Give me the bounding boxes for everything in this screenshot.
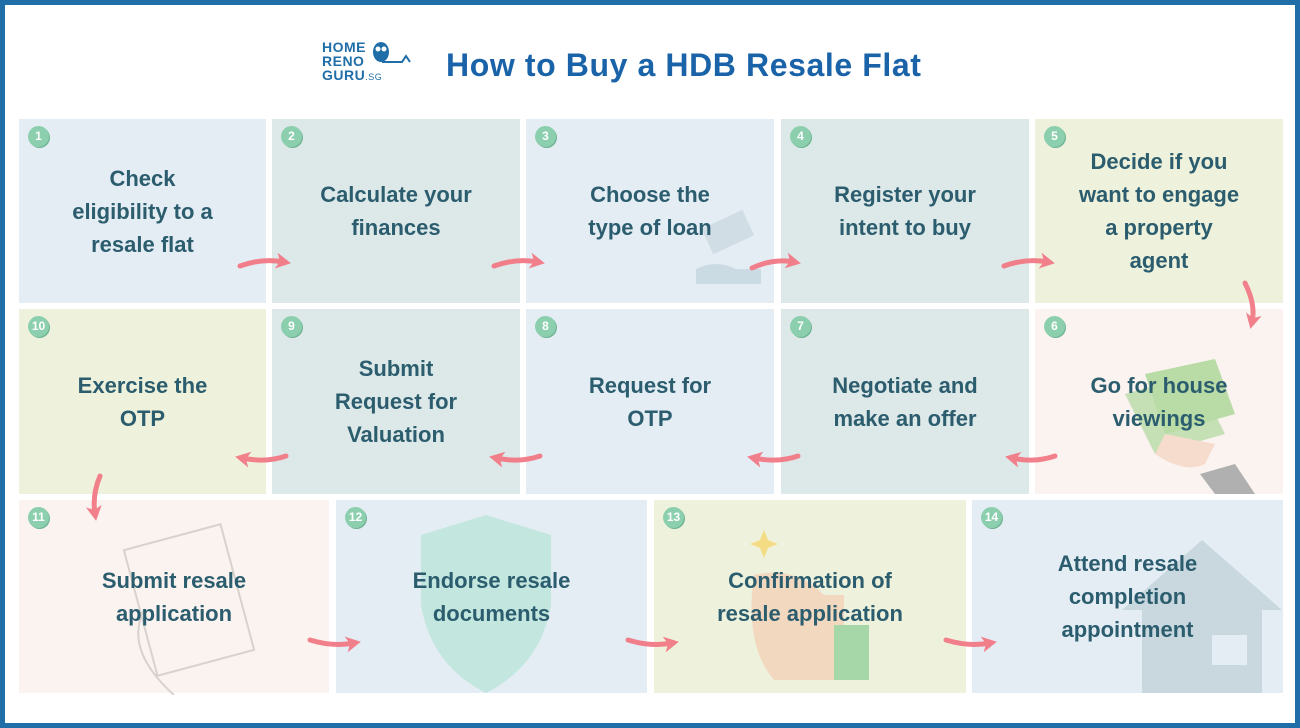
panel 1 — [19, 119, 266, 303]
panel 8: OTP — [627, 406, 673, 430]
logo: RENO — [322, 53, 364, 69]
panel 6: Go for house — [1091, 372, 1227, 398]
panel 9: Submit — [359, 356, 433, 381]
panel 14 — [972, 500, 1283, 693]
panel 10 — [19, 309, 266, 494]
panel 5: agent — [1130, 248, 1188, 273]
panel 11: application — [116, 600, 232, 626]
panel 5: 5 — [1051, 129, 1058, 143]
panel 5: Decide if you — [1091, 149, 1227, 174]
panel 4: Register your — [834, 182, 976, 207]
panel 12 — [336, 500, 647, 693]
panel 12: Endorse resale — [413, 568, 570, 592]
panel 14: 14 — [985, 510, 998, 524]
title: How to Buy a HDB Resale Flat — [446, 47, 922, 83]
panel 9: Request for — [335, 389, 457, 414]
panel 7: Negotiate and — [832, 372, 978, 398]
panel 5 — [1035, 119, 1283, 303]
panel 12: 12 — [349, 510, 362, 524]
panel 7: 7 — [797, 319, 804, 333]
panel 13 — [654, 500, 966, 693]
panel 9: 9 — [288, 319, 295, 333]
panel 8 — [526, 309, 774, 494]
panel 13: 13 — [667, 510, 680, 524]
panel 14: completion — [1069, 584, 1186, 609]
panel 3: Choose the — [590, 182, 710, 207]
panel 8: Request for — [589, 372, 711, 398]
panel 9: Valuation — [347, 422, 445, 447]
panel 10: OTP — [120, 406, 165, 430]
panel 8: 8 — [542, 319, 549, 333]
panel 11 — [19, 500, 329, 693]
panel 5: want to engage — [1079, 182, 1239, 207]
panel 6: viewings — [1113, 406, 1205, 430]
panel 6 — [1035, 309, 1283, 494]
panel 10: Exercise the — [78, 372, 207, 398]
panel 2: 2 — [288, 129, 295, 143]
panel 7 — [781, 309, 1029, 494]
panel 2: Calculate your — [320, 182, 472, 207]
panel 10: 10 — [32, 319, 45, 333]
panel 3: 3 — [542, 129, 549, 143]
panel 12: documents — [433, 600, 550, 626]
panel 14: Attend resale — [1058, 551, 1197, 576]
panel 14: appointment — [1061, 617, 1193, 642]
logo: HOME — [322, 39, 366, 55]
panel 4 — [781, 119, 1029, 303]
logo: GURU.SG — [322, 67, 382, 83]
panel 1: resale flat — [91, 232, 194, 256]
panel 9 — [272, 309, 520, 494]
panel 1: 1 — [35, 129, 42, 143]
panel 1: eligibility to a — [72, 198, 213, 224]
panel 4: 4 — [797, 129, 804, 143]
panel 4: intent to buy — [839, 215, 971, 240]
panel 5: a property — [1105, 215, 1213, 240]
panel 11: Submit resale — [102, 568, 246, 592]
logo — [322, 39, 411, 83]
panel 13: Confirmation of — [728, 568, 892, 592]
panel 2 — [272, 119, 520, 303]
panel 1: Check — [109, 166, 176, 190]
panel 6: 6 — [1051, 319, 1058, 333]
panel 2: finances — [351, 215, 441, 240]
panel 11: 11 — [32, 510, 45, 524]
panel 3 — [526, 119, 774, 303]
panel 7: make an offer — [833, 406, 977, 430]
panel 13: resale application — [717, 600, 903, 626]
panel 3: type of loan — [588, 215, 712, 240]
